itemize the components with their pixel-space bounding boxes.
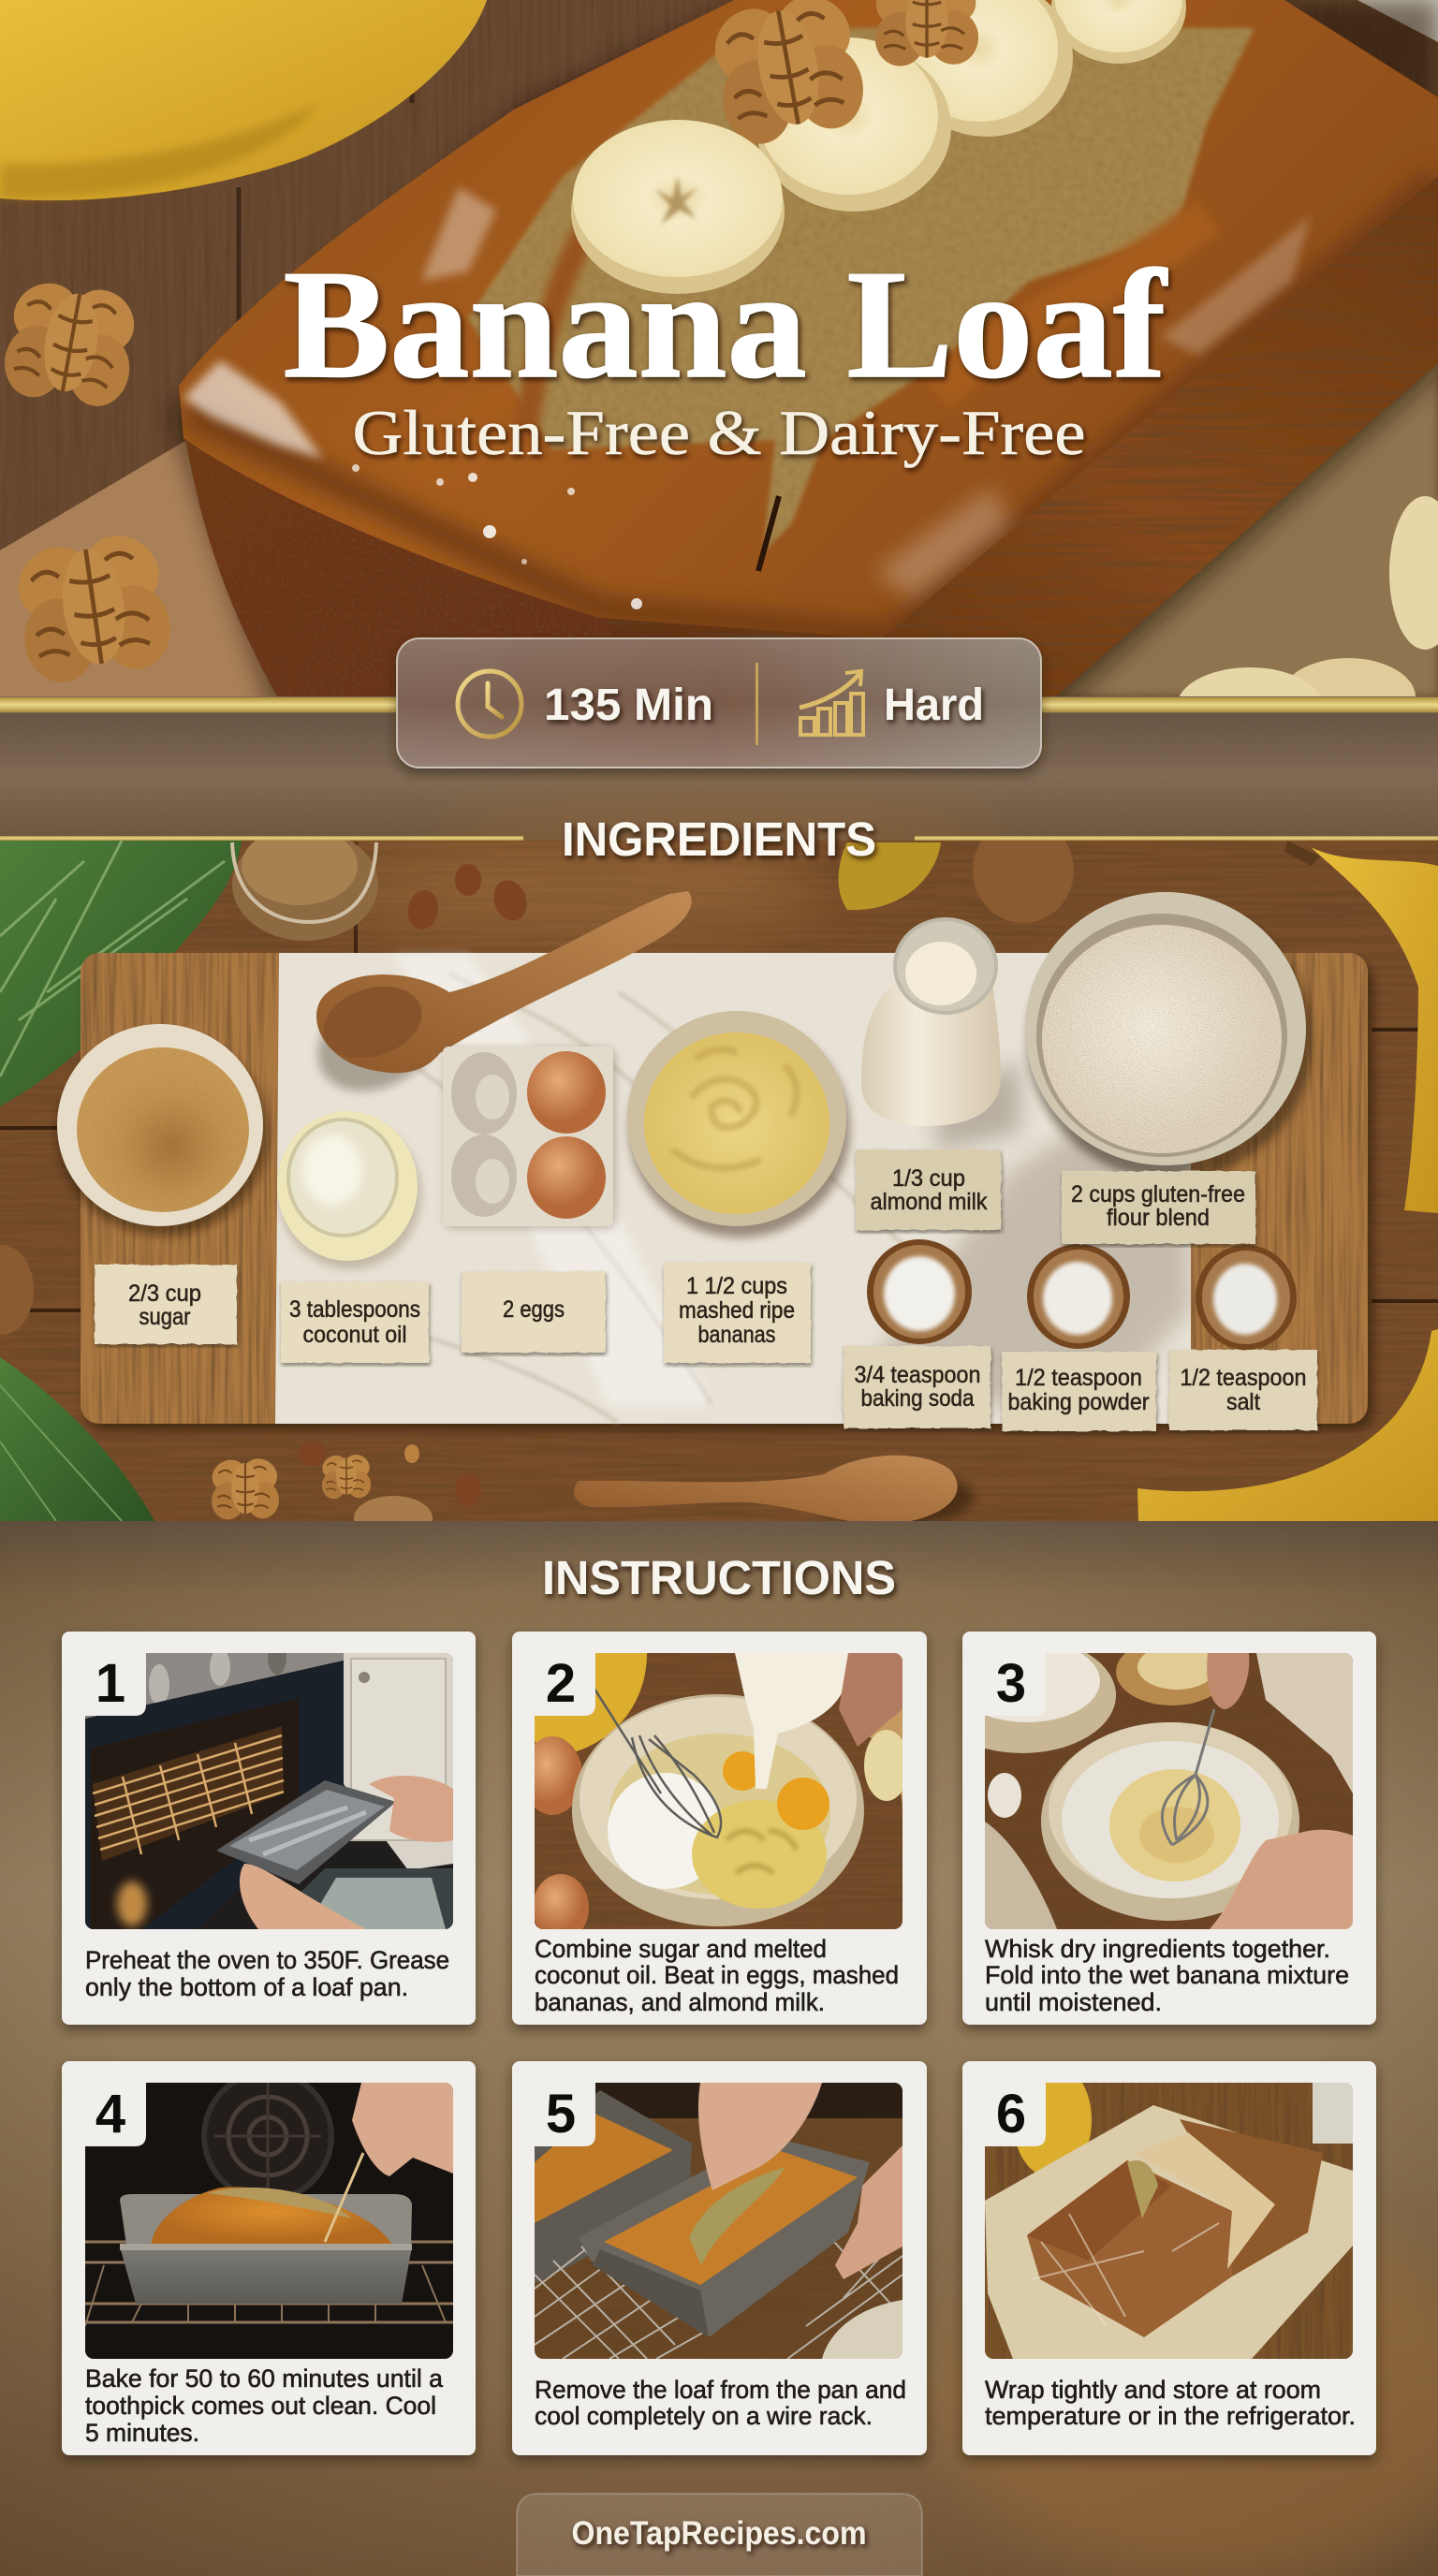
- right banana top: [1284, 841, 1438, 1213]
- step text: coconut oil. Beat in eggs, mashed: [535, 1961, 899, 1989]
- icon: walnut left upper: [5, 283, 135, 406]
- label: flour: 2 cups gluten-free: [1071, 1181, 1245, 1208]
- wood table: [0, 841, 1438, 1521]
- bowl of mashed banana: [627, 1011, 850, 1237]
- step number 1: 1: [95, 1653, 125, 1714]
- label: sugar: [95, 1265, 237, 1344]
- loaf right side: [599, 174, 1438, 696]
- step text: Bake for 50 to 60 minutes until a: [85, 2364, 444, 2393]
- label: salt: [1169, 1350, 1317, 1430]
- loaf top crust: [179, 0, 1438, 638]
- cloth corner: [1357, 0, 1438, 42]
- step number tab: [83, 2081, 146, 2146]
- wooden table: [0, 0, 1438, 696]
- label: baking powder: [1002, 1352, 1156, 1431]
- label: coconut oil: coconut oil: [303, 1322, 406, 1348]
- left banana leaf: [0, 841, 242, 1106]
- jar of coconut oil: [277, 1111, 421, 1269]
- step text: Wrap tightly and store at room: [985, 2376, 1321, 2404]
- almonds: [405, 864, 532, 931]
- label: almond milk: almond milk: [871, 1189, 988, 1215]
- cutting board: [0, 426, 281, 696]
- crust shading and gloss: [183, 28, 1438, 637]
- crumb crack: [468, 28, 1255, 552]
- label: coconut oil: [281, 1281, 429, 1363]
- step text: only the bottom of a loaf pan.: [85, 1973, 408, 2001]
- cutting board: [81, 953, 1373, 1430]
- panel: hero photo of banana loaf: [0, 0, 1438, 746]
- label: almond milk: 1/3 cup: [892, 1165, 965, 1192]
- icon: walnut left lower: [19, 535, 170, 682]
- icon: difficulty chart: [800, 671, 863, 735]
- prep time: 135 Min: [544, 681, 713, 730]
- jar of sugar: [232, 827, 378, 941]
- difficulty: Hard: [884, 681, 984, 730]
- panel: instructions background: [0, 1521, 1438, 2576]
- label: flour: [1062, 1171, 1255, 1244]
- label: baking powder: 1/2 teaspoon: [1015, 1365, 1142, 1391]
- parchment right: [1049, 356, 1438, 696]
- step number 6: 6: [996, 2084, 1026, 2144]
- step text: [85, 1946, 449, 2001]
- loaf shadow: [169, 0, 1438, 711]
- small nuts: [206, 1441, 481, 1541]
- label: salt: 1/2 teaspoon: [1180, 1365, 1307, 1391]
- label: almond milk: [856, 1149, 1001, 1230]
- photo: wrapped loaf on parchment: [985, 2062, 1353, 2359]
- step text: [535, 1935, 899, 2016]
- right banana bottom: [1137, 1329, 1438, 1521]
- card: step 5: [512, 2061, 927, 2455]
- gold band right: [1035, 697, 1438, 712]
- loaf of banana bread: [169, 0, 1438, 711]
- icon: banana: [0, 0, 487, 200]
- banana slices right: [1180, 496, 1438, 696]
- label: baking soda: [844, 1346, 990, 1428]
- label: baking soda: 3/4 teaspoon: [854, 1362, 981, 1388]
- step text: Remove the loaf from the pan and: [535, 2376, 906, 2404]
- step text: Fold into the wet banana mixture: [985, 1961, 1349, 1989]
- step text: [535, 2376, 906, 2430]
- card: step 6: [962, 2061, 1376, 2455]
- step text: temperature or in the refrigerator.: [985, 2402, 1356, 2430]
- heading: ingredients: INGREDIENTS: [562, 812, 876, 866]
- icon: clock: [458, 671, 521, 737]
- divider: [756, 663, 758, 745]
- label: salt: salt: [1226, 1389, 1260, 1415]
- step text: [985, 2376, 1356, 2430]
- gold band left: [0, 697, 403, 712]
- bottom wooden spoon: [574, 1456, 974, 1526]
- gold line left of ingredients heading: [0, 836, 523, 841]
- label: flour: flour blend: [1107, 1205, 1210, 1231]
- band between hero and ingredients: [0, 713, 1438, 841]
- wooden spoon top: [299, 891, 692, 1112]
- panel: ingredients flat lay: [0, 818, 1438, 1541]
- step text: Whisk dry ingredients together.: [985, 1935, 1330, 1963]
- bowl of flour: [1025, 892, 1313, 1179]
- step text: 5 minutes.: [85, 2419, 199, 2447]
- step number tab: [533, 1651, 595, 1716]
- topping: banana slices and walnuts: [571, 0, 1186, 294]
- step number 3: 3: [996, 1653, 1026, 1714]
- label: bananas: mashed ripe: [679, 1297, 795, 1324]
- card: step 1: [62, 1632, 476, 2025]
- walnut left edge: [0, 1245, 34, 1335]
- website: OneTapRecipes.com: [571, 2515, 867, 2552]
- label: sugar: sugar: [139, 1304, 191, 1330]
- warm glow behind heading: [438, 794, 1000, 872]
- step text: Combine sugar and melted: [535, 1935, 827, 1963]
- label: eggs: 2 eggs: [503, 1296, 565, 1323]
- label: baking soda: baking soda: [861, 1385, 975, 1412]
- step number 4: 4: [95, 2084, 125, 2144]
- label: baking powder: baking powder: [1007, 1389, 1150, 1415]
- step number tab: [983, 2081, 1046, 2146]
- label: coconut oil: 3 tablespoons: [289, 1296, 420, 1323]
- gold line right of ingredients heading: [915, 836, 1438, 841]
- label: bananas: bananas: [698, 1322, 775, 1348]
- card: step 2: [512, 1632, 927, 2025]
- step number tab: [533, 2081, 595, 2146]
- photo: cooling loaf on rack: [535, 2083, 902, 2359]
- step text: cool completely on a wire rack.: [535, 2402, 873, 2430]
- footer badge: [517, 2494, 922, 2576]
- label: eggs: [462, 1271, 606, 1353]
- lower left banana leaf: [0, 1357, 154, 1521]
- photo: oven and pan: [85, 1641, 453, 1929]
- eggs: [527, 1051, 606, 1219]
- subtitle: Gluten-Free & Dairy-Free: [352, 397, 1086, 468]
- card: step 3: [929, 1632, 1376, 2025]
- step text: Preheat the oven to 350F. Grease: [85, 1946, 449, 1974]
- label: bananas: [664, 1262, 811, 1363]
- loaf front face: [179, 393, 660, 696]
- step number tab: [983, 1651, 1046, 1716]
- step text: until moistened.: [985, 1988, 1162, 2016]
- badge background: [397, 638, 1041, 768]
- card: step 4: [62, 2061, 476, 2455]
- photo: mixing wet ingredients: [522, 1653, 909, 1941]
- egg carton: [443, 1046, 615, 1228]
- photo: baking loaf in oven: [85, 2072, 453, 2359]
- bowl of sugar: [57, 1024, 268, 1236]
- label: sugar: 2/3 cup: [128, 1281, 201, 1307]
- panel: time and difficulty badge: [397, 638, 1041, 768]
- marble slab: [275, 953, 1191, 1424]
- step text: [985, 1935, 1349, 2016]
- step text: toothpick comes out clean. Cool: [85, 2392, 436, 2420]
- jar of almond milk: [861, 919, 1020, 1151]
- ingredient labels: [95, 1149, 1317, 1431]
- walnut whole top: [973, 818, 1074, 923]
- heading: instructions: INSTRUCTIONS: [542, 1551, 896, 1604]
- banana small: [839, 842, 941, 910]
- small bowls: soda, powder, salt: [867, 1239, 1297, 1350]
- step text: [85, 2364, 444, 2447]
- label: bananas: 1 1/2 cups: [686, 1273, 787, 1299]
- title: Banana Loaf: [283, 238, 1167, 410]
- step number 5: 5: [546, 2084, 576, 2144]
- step text: bananas, and almond milk.: [535, 1988, 825, 2016]
- photo: folding dry ingredients: [929, 1637, 1353, 1929]
- step number 2: 2: [546, 1653, 576, 1714]
- step number tab: [83, 1651, 146, 1716]
